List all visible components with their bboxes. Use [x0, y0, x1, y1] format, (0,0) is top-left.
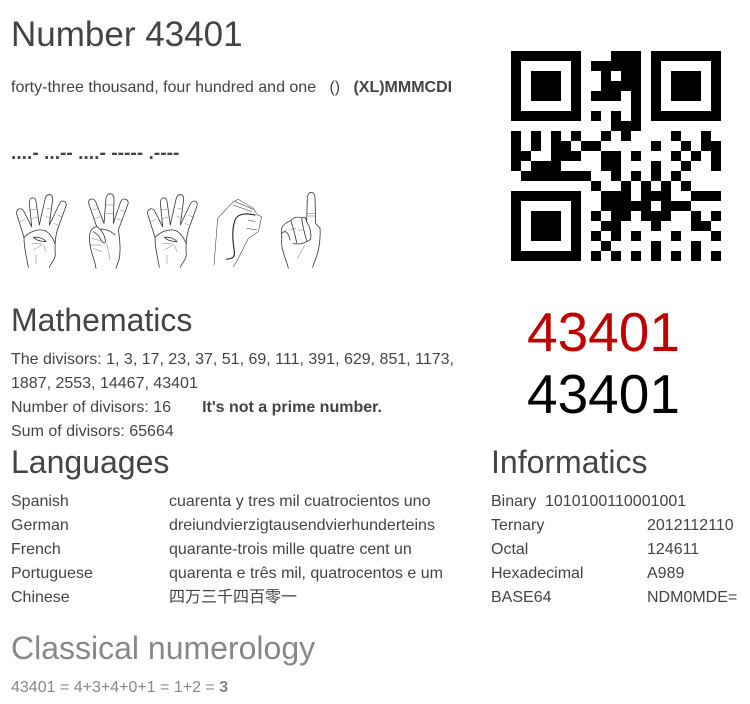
informatics labels: Octal — [491, 541, 528, 558]
translations: 四万三千四百零一 — [169, 589, 297, 606]
hand: one — [282, 192, 320, 268]
hand: four — [148, 195, 197, 267]
translations: quarenta e três mil, quatrocentos e um — [169, 565, 443, 582]
language names: Portuguese — [11, 565, 93, 582]
informatics values: 2012112110 — [647, 517, 734, 534]
hand: three — [89, 194, 128, 268]
divisors text block: The divisors: 1, 3, 17, 23, 37, 51, 69, 111, 391, 629, 851, 1173, — [11, 351, 454, 368]
language names: Spanish — [11, 493, 69, 510]
divisors text block: Sum of divisors: 65664 — [11, 423, 174, 440]
numerology calculation: 43401 = 4+3+4+0+1 = 1+2 = 3 — [11, 679, 228, 696]
translations — [169, 493, 443, 606]
morse code: ....- ...-- ....- ----- .---- — [11, 143, 179, 164]
heading: mathematics: Mathematics — [11, 302, 192, 338]
divisors text block — [11, 351, 454, 440]
heading: languages: Languages — [11, 444, 169, 480]
sign language hands — [16, 192, 321, 269]
informatics labels: Binary — [491, 493, 536, 510]
informatics values: NDM0MDE= — [647, 589, 737, 606]
hand: zero — [214, 199, 262, 267]
translations: quarante-trois mille quatre cent un — [169, 541, 412, 558]
informatics labels — [491, 493, 583, 606]
divisors text block: Number of divisors: 16 It's not a prime number. — [11, 399, 382, 416]
language names: German — [11, 517, 69, 534]
informatics labels: Ternary — [491, 517, 544, 534]
number in words and roman numeral: forty-three thousand, four hundred and one () (XL)MMMCDI — [11, 79, 452, 96]
hand: four — [17, 195, 66, 267]
translations: cuarenta y tres mil cuatrocientos uno — [169, 493, 430, 510]
informatics values: 124611 — [647, 541, 699, 558]
title: Number 43401 — [11, 15, 243, 54]
informatics values: A989 — [647, 565, 684, 582]
QR code — [511, 51, 721, 261]
divisors text block: 1887, 2553, 14467, 43401 — [11, 375, 198, 392]
heading: classical numerology: Classical numerology — [11, 630, 315, 666]
informatics labels: BASE64 — [491, 589, 551, 606]
informatics values — [647, 517, 737, 606]
language names — [11, 493, 93, 606]
language names: Chinese — [11, 589, 70, 606]
translations: dreiundvierzigtausendvierhunderteins — [169, 517, 435, 534]
number in red: 43401 — [527, 301, 680, 363]
binary value: 1010100110001001 — [545, 493, 686, 510]
number in black: 43401 — [527, 363, 680, 425]
heading: informatics: Informatics — [491, 444, 647, 480]
language names: French — [11, 541, 61, 558]
informatics labels: Hexadecimal — [491, 565, 583, 582]
